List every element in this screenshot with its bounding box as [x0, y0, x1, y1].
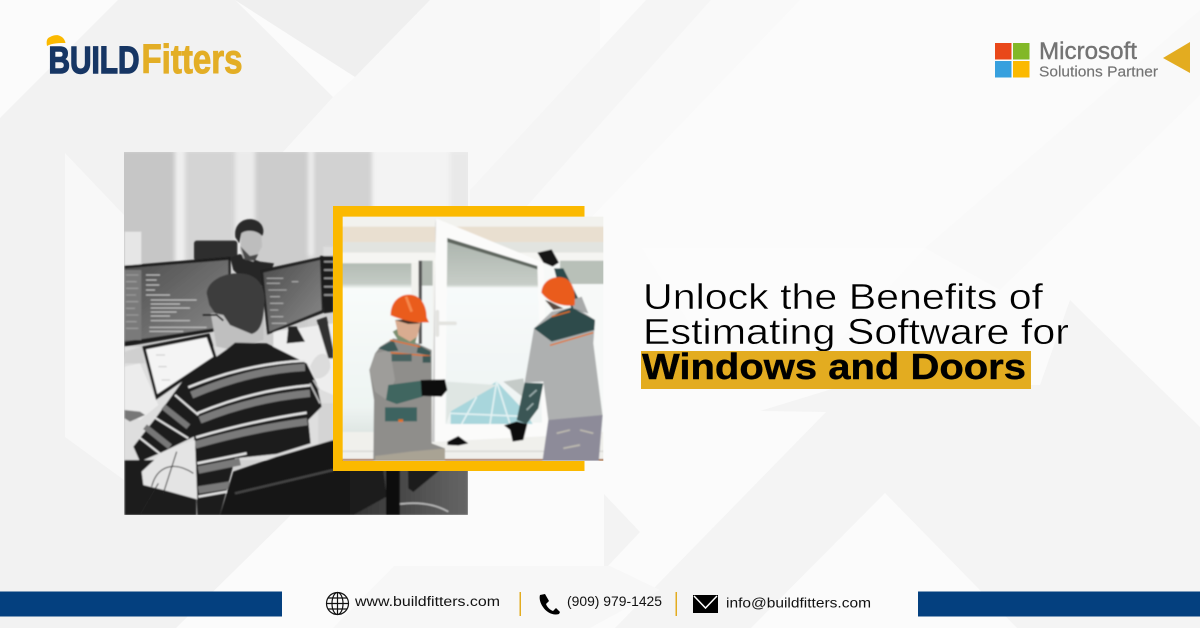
- contact: email: [693, 595, 871, 613]
- left glove: [421, 379, 447, 397]
- Microsoft wordmark: Microsoft: [1039, 38, 1137, 65]
- office wall: [120, 150, 473, 517]
- heading: [641, 276, 1069, 389]
- bottom floor and chair: [125, 460, 196, 515]
- laptop: [142, 333, 217, 400]
- skylight seen through glass: [451, 381, 533, 424]
- right worker: [504, 249, 603, 467]
- contact: website: [326, 592, 500, 614]
- right worker trousers: [542, 415, 603, 467]
- papers on desk: [125, 363, 158, 420]
- icon: hard hat: [47, 35, 66, 46]
- back developer: [194, 219, 274, 290]
- front developer: [133, 273, 322, 515]
- room background: [337, 210, 610, 467]
- photo frame: yellow border: [333, 206, 585, 471]
- icon: Microsoft squares: [995, 43, 1030, 78]
- left worker: [369, 295, 447, 461]
- photo: developers at monitors (grayscale): [120, 150, 473, 517]
- footer bar right: [918, 592, 1200, 616]
- footer bar left: [0, 592, 282, 616]
- icon: globe: [326, 592, 348, 614]
- right monitors: [260, 247, 333, 379]
- photo: workers installing window: [337, 210, 610, 467]
- left hard hat: [390, 295, 429, 323]
- website text: www.buildfitters.com: [354, 594, 500, 609]
- heading line 3: Windows and Doors: [642, 346, 1026, 387]
- open window sash: [432, 218, 549, 446]
- badge: Microsoft Solutions Partner: [995, 38, 1158, 80]
- divider: [676, 592, 677, 616]
- phone text: (909) 979-1425: [567, 594, 662, 609]
- desk: [125, 347, 335, 460]
- Solutions Partner label: Solutions Partner: [1039, 64, 1158, 80]
- icon: gold triangle: [1163, 42, 1190, 73]
- right worker gloves: [537, 249, 559, 267]
- heading line 1: Unlock the Benefits of: [643, 276, 1044, 317]
- striped sweater: [133, 343, 322, 515]
- left monitor: [125, 257, 231, 347]
- logo: BuildFitters: [47, 35, 242, 82]
- email text: info@buildfitters.com: [726, 596, 871, 610]
- logo word BUILD: BUILD: [48, 40, 140, 82]
- divider: [520, 592, 521, 616]
- heading line 2: Estimating Software for: [643, 311, 1069, 352]
- icon: envelope: [693, 595, 718, 613]
- heading highlight: [641, 351, 1031, 389]
- contact: phone: [540, 594, 662, 615]
- window handle: [437, 312, 455, 335]
- logo word Fitters: Fitters: [142, 36, 242, 82]
- icon: phone handset: [540, 594, 560, 615]
- right hard hat: [541, 277, 575, 306]
